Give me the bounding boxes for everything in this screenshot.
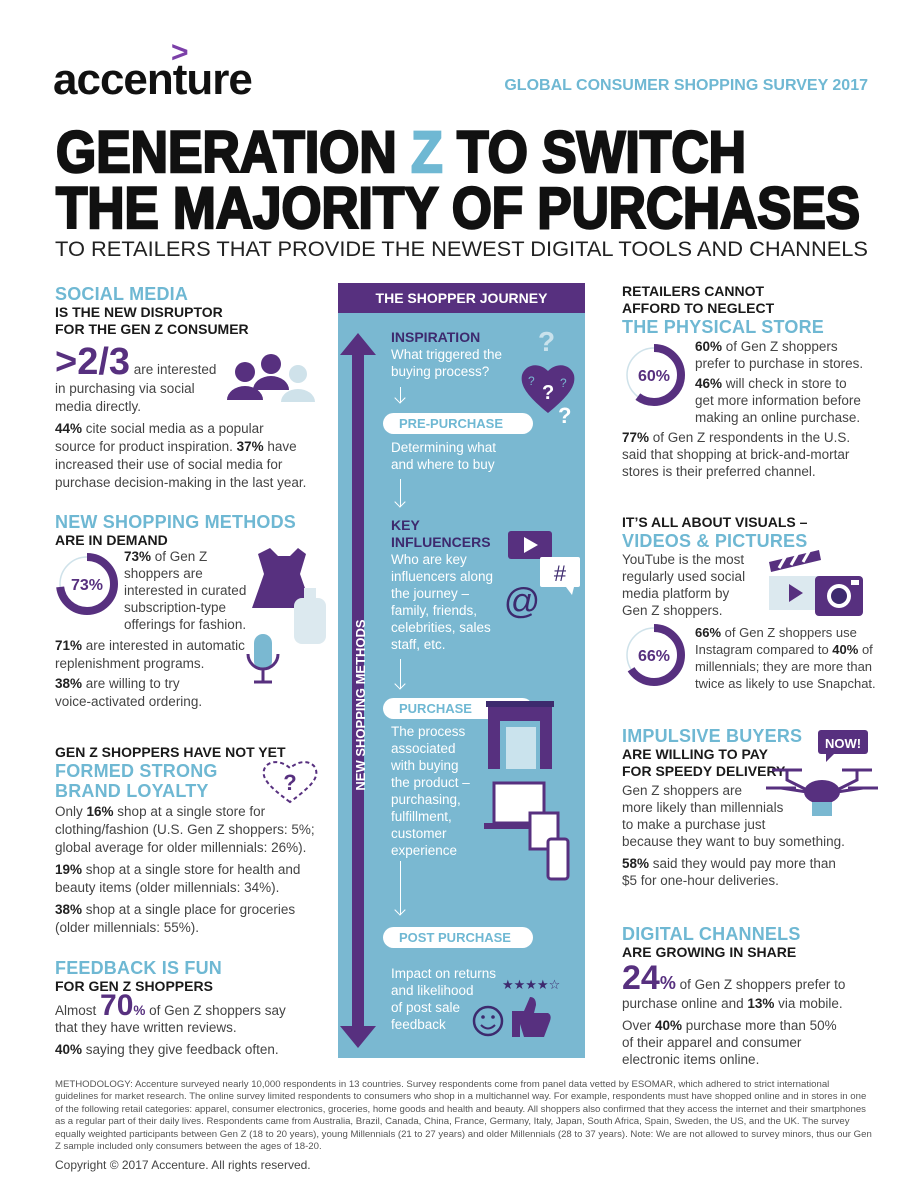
panel: visuals: regularly used social (622, 569, 745, 584)
panel: social media: SOCIAL MEDIA (55, 284, 188, 304)
header (338, 283, 585, 313)
panel: physical store: 77% of Gen Z respondents in the U.S. (622, 430, 850, 445)
panel: shopper journey: Impact on returns (391, 966, 496, 981)
panel: social media: source for product inspiration. 37% have (55, 439, 297, 454)
panel: brand loyalty (55, 744, 318, 935)
donut 73%: 73% (71, 577, 103, 594)
panel: physical store: prefer to purchase in stores. (695, 356, 863, 371)
panel: shopper journey: purchasing, (391, 792, 461, 807)
panel: brand loyalty: 19% shop at a single store for health and (55, 862, 300, 877)
panel: shopper journey: associated (391, 741, 456, 756)
panel: digital channels: DIGITAL CHANNELS (622, 924, 801, 944)
panel: shopper journey: customer (391, 826, 447, 841)
panel: new shopping methods: 71% are interested in automatic (55, 638, 245, 653)
panel: physical store: making an online purchase. (695, 410, 860, 425)
panel: social media: 44% cite social media as a popular (55, 421, 264, 436)
icon: heart questions: ? (560, 376, 567, 390)
step: key influencers: the journey – (391, 586, 469, 601)
panel: brand loyalty: clothing/fashion (U.S. Gen Z shoppers: 5%; (55, 822, 315, 837)
panel: shopper journey (338, 283, 585, 1058)
panel: brand loyalty: beauty items (older millennials: 34%). (55, 880, 279, 895)
panel: visuals: media platform by (622, 586, 729, 601)
panel: social media: media directly. (55, 399, 141, 414)
methodology text: METHODOLOGY: Accenture surveyed nearly 10,000 respondents in 13 countries. Survey respondents come from panel data vetted by ESOMAR, which adhered to strict international guidelines for market research. The online survey limited respondents to consumers who shop in a multichannel way. For example, respondents must have shopped online and in stores in one of the following retail categories: apparel, consumer electronics, groceries, home goods and health and beauty. All shoppers also confirmed that they access the internet and their smartphones as a regular part of their daily lives. Respondents came from Australia, Brazil, Canada, China, France, Germany, Italy, Japan, South Africa, Spain, Sweden, the US, and the UK. The survey equally weighted participants between Gen Z (18 to 20 years), young Millennials (21 to 27 years) and older Millennials (28 to 37 years). Note: We are not allowed to survey minors, thus our Gen Z sample included only consumers between the ages of 18-20. (55, 1079, 872, 1152)
panel: new shopping methods: 73% of Gen Z (124, 549, 207, 564)
icon: play, hash, at (504, 531, 580, 621)
label: new shopping methods: NEW SHOPPING METHODS (353, 619, 368, 791)
panel: shopper journey: feedback (391, 1017, 446, 1032)
panel: shopper journey: The process (391, 724, 465, 739)
step: purchase (383, 698, 533, 719)
icon: drone with now bubble: NOW! (825, 736, 861, 751)
panel: digital channels (622, 924, 845, 1067)
icon: heart questions: ? (538, 326, 555, 357)
panel: feedback: Almost 70% of Gen Z shoppers say (55, 989, 286, 1022)
panel: visuals: Gen Z shoppers. (622, 603, 723, 618)
panel: new shopping methods: 38% are willing to try (55, 676, 180, 691)
logo: accenture (53, 55, 252, 104)
panel: impulsive buyers: because they want to buy something. (622, 834, 845, 849)
panel: physical store: THE PHYSICAL STORE (622, 317, 824, 337)
panel: physical store: 60% of Gen Z shoppers (695, 339, 838, 354)
panel: new shopping methods: voice-activated ordering. (55, 694, 202, 709)
panel: brand loyalty: GEN Z SHOPPERS HAVE NOT YET (55, 744, 286, 760)
panel: digital channels: 24% of Gen Z shoppers prefer to (622, 959, 845, 997)
panel: feedback: 40% saying they give feedback often. (55, 1042, 279, 1057)
step: pre-purchase: PRE-PURCHASE (399, 416, 503, 431)
panel: new shopping methods (55, 512, 326, 709)
panel: feedback: FOR GEN Z SHOPPERS (55, 978, 213, 994)
panel: visuals: Instagram compared to 40% of (695, 642, 873, 657)
panel: shopper journey: fulfillment, (391, 809, 452, 824)
arrow: vertical double arrow (340, 333, 376, 1048)
panel: new shopping methods: NEW SHOPPING METHODS (55, 512, 296, 532)
panel: visuals (622, 514, 876, 691)
step: key influencers: KEY (391, 517, 420, 533)
panel: visuals: millennials; they are more than (695, 659, 872, 674)
panel: new shopping methods: interested in curated (124, 583, 246, 598)
panel: new shopping methods: subscription-type (124, 600, 226, 615)
panel: shopper journey: and where to buy (391, 457, 495, 472)
text: purchase decision-making in the last year. (55, 475, 306, 490)
arrow: down 3 (394, 659, 406, 690)
icon: play, hash, at: @ (504, 580, 540, 621)
panel: impulsive buyers: $5 for one-hour deliveries. (622, 873, 779, 888)
panel: brand loyalty: Only 16% shop at a single store for (55, 804, 265, 819)
donut 66% (626, 624, 685, 686)
icon: stars, smile, thumb (472, 978, 560, 1037)
panel: social media (55, 284, 315, 490)
arrow: down 2 (394, 479, 406, 508)
panel: shopper journey: with buying (391, 758, 459, 773)
step: purchase: PURCHASE (399, 701, 472, 716)
panel: digital channels: ARE GROWING IN SHARE (622, 944, 796, 960)
panel: physical store: AFFORD TO NEGLECT (622, 300, 774, 316)
panel: physical store: said that shopping at brick-and-mortar (622, 447, 849, 462)
step: post purchase (383, 927, 533, 948)
arrow: down 4 (394, 861, 406, 916)
icon: heart questions (522, 326, 574, 423)
panel: brand loyalty: FORMED STRONG (55, 761, 218, 781)
title (55, 120, 868, 260)
step: post purchase: POST PURCHASE (399, 930, 511, 945)
panel: visuals: 66% of Gen Z shoppers use (695, 625, 857, 640)
panel: impulsive buyers: IMPULSIVE BUYERS (622, 726, 802, 746)
step: key influencers: celebrities, sales (391, 620, 491, 635)
panel: shopper journey: experience (391, 843, 457, 858)
panel: brand loyalty: 38% shop at a single place for groceries (55, 902, 295, 917)
icon: heart questions: ? (542, 382, 554, 404)
icon: store and devices (484, 701, 570, 880)
step: inspiration (391, 329, 502, 379)
panel: new shopping methods: replenishment programs. (55, 656, 204, 671)
panel: digital channels: purchase online and 13% via mobile. (622, 996, 843, 1011)
step: key influencers (391, 517, 493, 652)
icon: people (227, 354, 315, 402)
icon: play, hash, at: # (554, 561, 567, 586)
arrow: down 1 (394, 387, 406, 404)
panel: physical store: get more information before (695, 393, 861, 408)
step: key influencers: Who are key (391, 552, 467, 567)
panel: feedback (55, 958, 286, 1057)
panel: physical store: 46% will check in store to (695, 376, 847, 391)
panel: digital channels: Over 40% purchase more than 50% (622, 1018, 837, 1033)
icon: drone with now bubble (766, 730, 878, 816)
icon: dashed heart: ? (283, 770, 297, 795)
panel: social media: FOR THE GEN Z CONSUMER (55, 321, 249, 337)
step: key influencers: staff, etc. (391, 637, 446, 652)
panel: digital channels: of their apparel and consumer (622, 1035, 801, 1050)
step: key influencers: INFLUENCERS (391, 534, 491, 550)
panel: impulsive buyers (622, 726, 878, 888)
step: key influencers: family, friends, (391, 603, 477, 618)
step: inspiration: INSPIRATION (391, 329, 480, 345)
panel: new shopping methods: offerings for fashion. (124, 617, 246, 632)
step: inspiration: buying process? (391, 364, 489, 379)
step: pre-purchase (383, 413, 533, 434)
panel: visuals: YouTube is the most (622, 552, 744, 567)
panel: social media: in purchasing via social (55, 381, 195, 396)
panel: new shopping methods: shoppers are (124, 566, 203, 581)
panel: visuals: twice as likely to use Snapchat. (695, 676, 876, 691)
icon: stars, smile, thumb: ★★★★☆ (502, 978, 560, 993)
icon: heart questions: ? (528, 374, 535, 388)
panel: shopper journey: and likelihood (391, 983, 474, 998)
panel: visuals: VIDEOS & PICTURES (622, 531, 807, 551)
panel: feedback: FEEDBACK IS FUN (55, 958, 222, 978)
panel: social media: >2/3 are interested (55, 341, 216, 383)
panel: physical store (622, 283, 863, 479)
panel: visuals: IT’S ALL ABOUT VISUALS – (622, 514, 807, 530)
panel: brand loyalty: BRAND LOYALTY (55, 781, 209, 801)
panel: digital channels: electronic items online. (622, 1052, 759, 1067)
panel: impulsive buyers: FOR SPEEDY DELIVERY (622, 763, 785, 779)
panel: impulsive buyers: more likely than millennials (622, 800, 783, 815)
step: key influencers: influencers along (391, 569, 493, 584)
step: inspiration: What triggered the (391, 347, 502, 362)
logo: > (171, 36, 189, 69)
panel: social media: increased their use of social media for (55, 457, 282, 472)
panel: impulsive buyers: Gen Z shoppers are (622, 783, 742, 798)
panel: social media: IS THE NEW DISRUPTOR (55, 304, 223, 320)
panel: new shopping methods: ARE IN DEMAND (55, 532, 168, 548)
header: THE SHOPPER JOURNEY (376, 290, 547, 306)
donut 60% (626, 344, 685, 406)
panel: impulsive buyers: to make a purchase just (622, 817, 765, 832)
icon: dashed heart (262, 761, 318, 804)
panel: shopper journey: Determining what (391, 440, 496, 455)
donut 60%: 60% (638, 368, 670, 385)
panel: brand loyalty: (older millennials: 55%). (55, 920, 199, 935)
donut 66%: 66% (638, 648, 670, 665)
panel: impulsive buyers: ARE WILLING TO PAY (622, 746, 768, 762)
survey label: GLOBAL CONSUMER SHOPPING SURVEY 2017 (504, 77, 868, 94)
panel: feedback: that they have written reviews. (55, 1020, 237, 1035)
panel: shopper journey: the product – (391, 775, 470, 790)
panel: physical store: RETAILERS CANNOT (622, 283, 764, 299)
donut 73% (56, 553, 118, 615)
panel: shopper journey: of post sale (391, 1000, 460, 1015)
title: GENERATION Z TO SWITCH (56, 120, 746, 185)
icon: dress, bottle, mic (246, 548, 326, 684)
panel: physical store: stores is their preferred channel. (622, 464, 816, 479)
panel: impulsive buyers: 58% said they would pay more than (622, 856, 836, 871)
icon: clapper and camera (769, 550, 863, 616)
copyright: Copyright © 2017 Accenture. All rights reserved. (55, 1158, 311, 1172)
panel: brand loyalty: global average for older millennials: 26%). (55, 840, 306, 855)
